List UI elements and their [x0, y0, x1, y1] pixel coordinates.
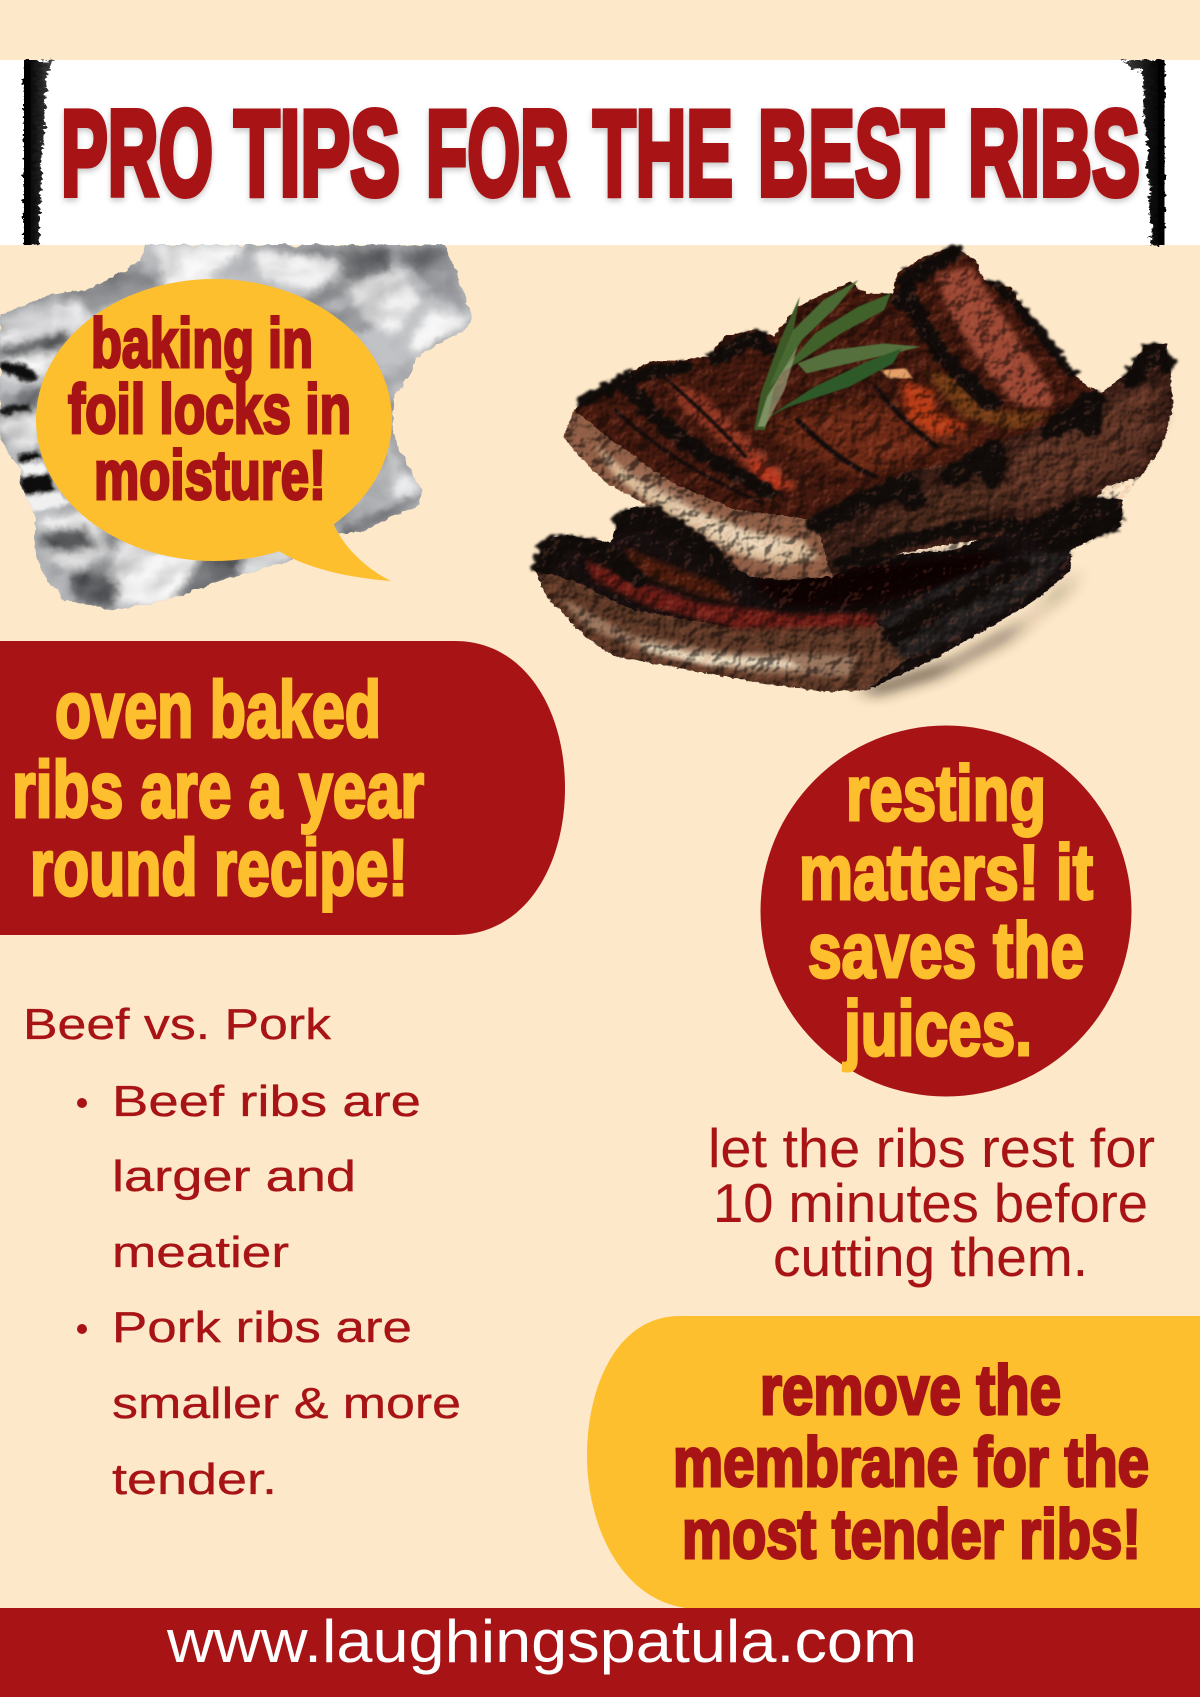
bullet: beef ribs: Beef ribs are	[112, 1077, 421, 1126]
lower rack cut face	[537, 572, 910, 692]
title text: THE	[593, 85, 733, 221]
title text: PRO	[61, 85, 213, 221]
char crust	[542, 253, 1166, 637]
bullet: beef ribs	[77, 1077, 421, 1277]
upper rack side wall	[815, 343, 1173, 577]
circle text: matters! it	[799, 828, 1093, 916]
bullet: pork ribs	[77, 1303, 461, 1504]
foil dark stripes	[0, 362, 70, 512]
yellow pill text	[673, 1351, 1149, 1573]
red pill: year round tip	[0, 641, 565, 935]
text block: resting note: let the ribs rest for	[708, 1117, 1155, 1179]
footer bar	[0, 1608, 1200, 1697]
bullet: pork ribs: smaller & more	[112, 1379, 461, 1428]
title text: BEST	[758, 85, 944, 221]
bullet: beef ribs: meatier	[112, 1228, 289, 1277]
speech bubble: foil tip	[36, 279, 392, 581]
bullet: beef ribs: larger and	[112, 1152, 356, 1201]
text block: beef vs pork: Beef vs. Pork	[23, 1000, 332, 1049]
red circle: resting tip	[760, 726, 1132, 1096]
ground shadow	[858, 570, 1079, 695]
rosemary sprig	[754, 280, 921, 430]
circle text: juices.	[842, 984, 1032, 1072]
pill text	[12, 665, 424, 912]
yellow pill text: remove the	[760, 1351, 1061, 1429]
lower rack	[535, 497, 1123, 692]
title banner	[0, 60, 1200, 245]
text block: beef vs pork	[23, 1000, 461, 1504]
title text	[61, 85, 1140, 221]
bump texture	[536, 249, 1172, 692]
pill text: oven baked	[55, 665, 381, 754]
bubble text	[68, 304, 351, 514]
circle text: saves the	[808, 906, 1084, 994]
text block: resting note: cutting them.	[773, 1226, 1088, 1288]
side wall reddish tones	[1010, 380, 1162, 513]
pill text: ribs are a year	[12, 745, 424, 834]
glaze stripes	[667, 380, 798, 493]
website url: www.laughingspatula.com	[166, 1608, 917, 1675]
circle text: resting	[846, 749, 1046, 837]
left frayed edge	[24, 60, 54, 245]
yellow pill: membrane tip	[587, 1316, 1200, 1609]
pill text: round recipe!	[30, 823, 408, 912]
title text: TIPS	[234, 85, 400, 221]
rib ridge lines	[615, 307, 988, 503]
bubble text: foil locks in	[68, 370, 351, 448]
foil sheet photo	[0, 240, 480, 620]
photo: stacked glazed ribs with rosemary	[520, 230, 1200, 710]
lower rack colour	[559, 547, 1071, 677]
bubble text: moisture!	[94, 436, 326, 514]
upper rack glazed top	[574, 247, 1101, 520]
foil crumple texture	[0, 240, 480, 620]
bullet: pork ribs: Pork ribs are	[112, 1303, 412, 1352]
bullet: pork ribs: tender.	[112, 1455, 277, 1504]
bubble text: baking in	[91, 304, 313, 382]
upper rack cut face	[563, 410, 832, 580]
circle text	[799, 749, 1093, 1072]
foil creases	[0, 245, 470, 610]
text block: resting note	[708, 1117, 1155, 1288]
right frayed edge	[1120, 60, 1164, 245]
title text: FOR	[426, 85, 569, 221]
text block: resting note: 10 minutes before	[713, 1172, 1148, 1234]
fat layer highlights	[594, 443, 819, 565]
upper rack	[563, 247, 1173, 580]
